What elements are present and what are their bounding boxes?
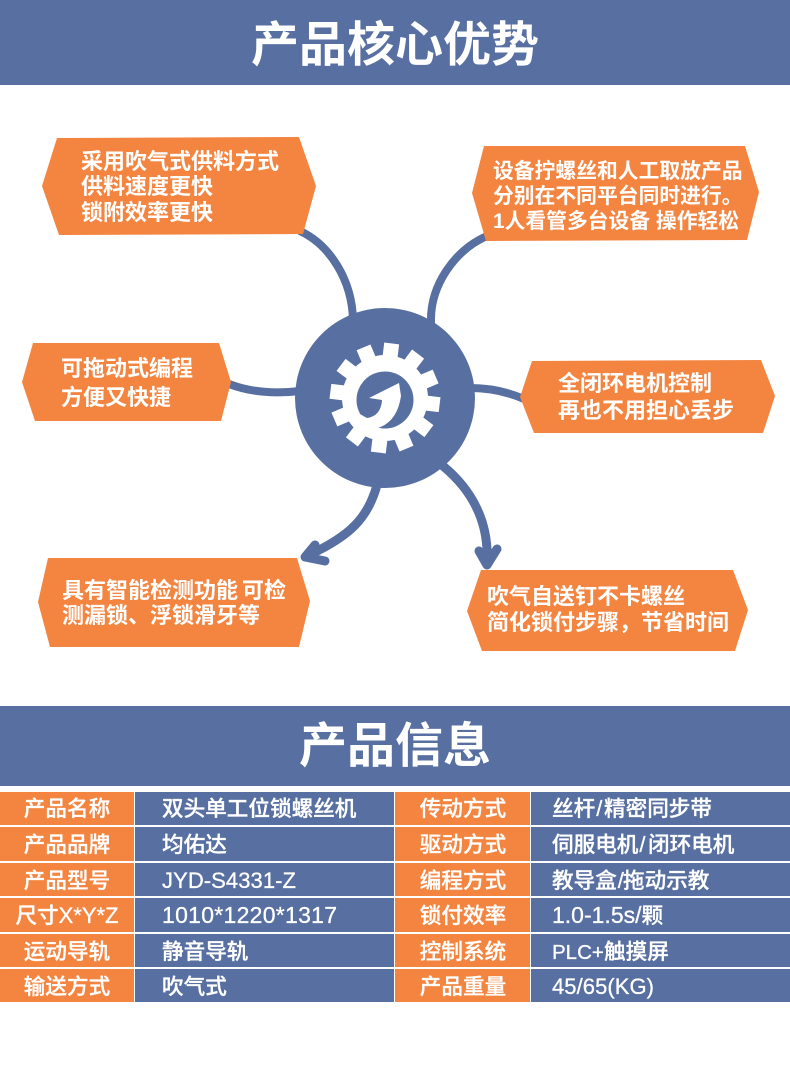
table row: name and transmission: 丝杆/	[552, 796, 602, 821]
arrow: hub to bottom-left callout	[305, 485, 377, 561]
callout: drag programming: 可拖动式编程	[61, 356, 193, 381]
table row: conveying and weight	[0, 969, 790, 1002]
table row: guide rail and control system: PLC+	[552, 941, 604, 964]
callout: intelligent detection: 具有智能检测功能	[62, 578, 238, 603]
table row: size and efficiency: 1.0-1.5s/	[552, 902, 642, 928]
table: product information	[0, 792, 790, 1002]
callout: air feeding	[42, 137, 316, 235]
table row: brand and drive: 产品品牌	[24, 832, 110, 857]
table row: conveying and weight: 45/65(KG)	[552, 974, 654, 999]
table row: name and transmission	[0, 792, 790, 825]
table row: model and programming: 拖动示教	[623, 868, 710, 893]
callout: drag programming	[22, 343, 231, 421]
callout: parallel operation: 设备拧螺丝和人工取放产品	[493, 159, 743, 183]
icon: central gear hub	[295, 308, 475, 488]
connector: top-left callout to hub	[300, 231, 353, 320]
callout: parallel operation	[472, 146, 759, 241]
table row: size and efficiency	[0, 898, 790, 932]
callout: air feeding: 供料速度更快	[81, 174, 213, 199]
table row: conveying and weight: 输送方式	[24, 974, 110, 999]
table row: brand and drive: 伺服电机/	[552, 832, 646, 857]
table row: guide rail and control system	[0, 934, 790, 967]
table row: model and programming: 产品型号	[24, 868, 110, 893]
table row: brand and drive: 驱动方式	[420, 832, 506, 857]
table row: size and efficiency: 颗	[642, 903, 663, 928]
callout: parallel operation: 1人看管多台设备 操作轻松	[493, 209, 739, 233]
table row: name and transmission: 精密同步带	[604, 796, 712, 821]
table row: model and programming: JYD-S4331-Z	[162, 868, 296, 893]
connector: middle-left callout to hub	[229, 384, 300, 392]
table row: name and transmission: 产品名称	[24, 796, 110, 821]
connector: top-right callout to hub	[431, 236, 487, 322]
callout: intelligent detection: 测漏锁、浮锁滑牙等	[62, 603, 260, 628]
table row: brand and drive	[0, 827, 790, 861]
callout: drag programming: 方便又快捷	[61, 385, 171, 410]
heading: product information: 产品信息	[299, 720, 491, 773]
table row: model and programming: 编程方式	[420, 868, 506, 893]
table row: guide rail and control system: 运动导轨	[24, 939, 110, 964]
table row: guide rail and control system: 控制系统	[420, 939, 506, 964]
callout: blow-feed without jams: 吹气自送钉不卡螺丝	[487, 584, 685, 609]
callout: parallel operation: 分别在不同平台同时进行。	[493, 184, 743, 208]
table row: conveying and weight: 吹气式	[162, 974, 227, 999]
callout: air feeding: 锁附效率更快	[81, 200, 213, 225]
callout: intelligent detection: 可检	[242, 578, 286, 603]
table row: name and transmission: 传动方式	[420, 796, 506, 821]
callout: closed-loop motor: 全闭环电机控制	[558, 371, 712, 396]
table row: size and efficiency: 1010*1220*1317	[162, 902, 337, 928]
callout: blow-feed without jams: 简化锁付步骤，节省时间	[487, 610, 729, 635]
table row: conveying and weight: 产品重量	[420, 974, 506, 999]
table row: guide rail and control system: 触摸屏	[604, 939, 669, 964]
table row: size and efficiency: 尺寸X*Y*Z	[15, 903, 119, 928]
heading: product core advantages	[0, 0, 790, 85]
connector: middle-right callout to hub	[470, 388, 524, 399]
heading: product core advantages: 产品核心优势	[251, 19, 539, 72]
arrow: hub to bottom-right callout	[443, 466, 497, 565]
callout: closed-loop motor	[520, 360, 775, 433]
callout: air feeding: 采用吹气式供料方式	[81, 149, 279, 174]
callout: closed-loop motor: 再也不用担心丢步	[558, 398, 734, 423]
table row: guide rail and control system: 静音导轨	[162, 939, 248, 964]
table row: size and efficiency: 锁付效率	[420, 903, 506, 928]
table row: name and transmission: 双头单工位锁螺丝机	[162, 796, 357, 821]
callout: intelligent detection	[38, 558, 310, 647]
heading: product information	[0, 706, 790, 786]
table row: brand and drive: 均佑达	[162, 832, 227, 857]
table row: model and programming: 教导盒/	[552, 868, 624, 893]
table row: model and programming	[0, 863, 790, 896]
callout: blow-feed without jams	[467, 570, 748, 651]
table row: brand and drive: 闭环电机	[648, 832, 735, 857]
